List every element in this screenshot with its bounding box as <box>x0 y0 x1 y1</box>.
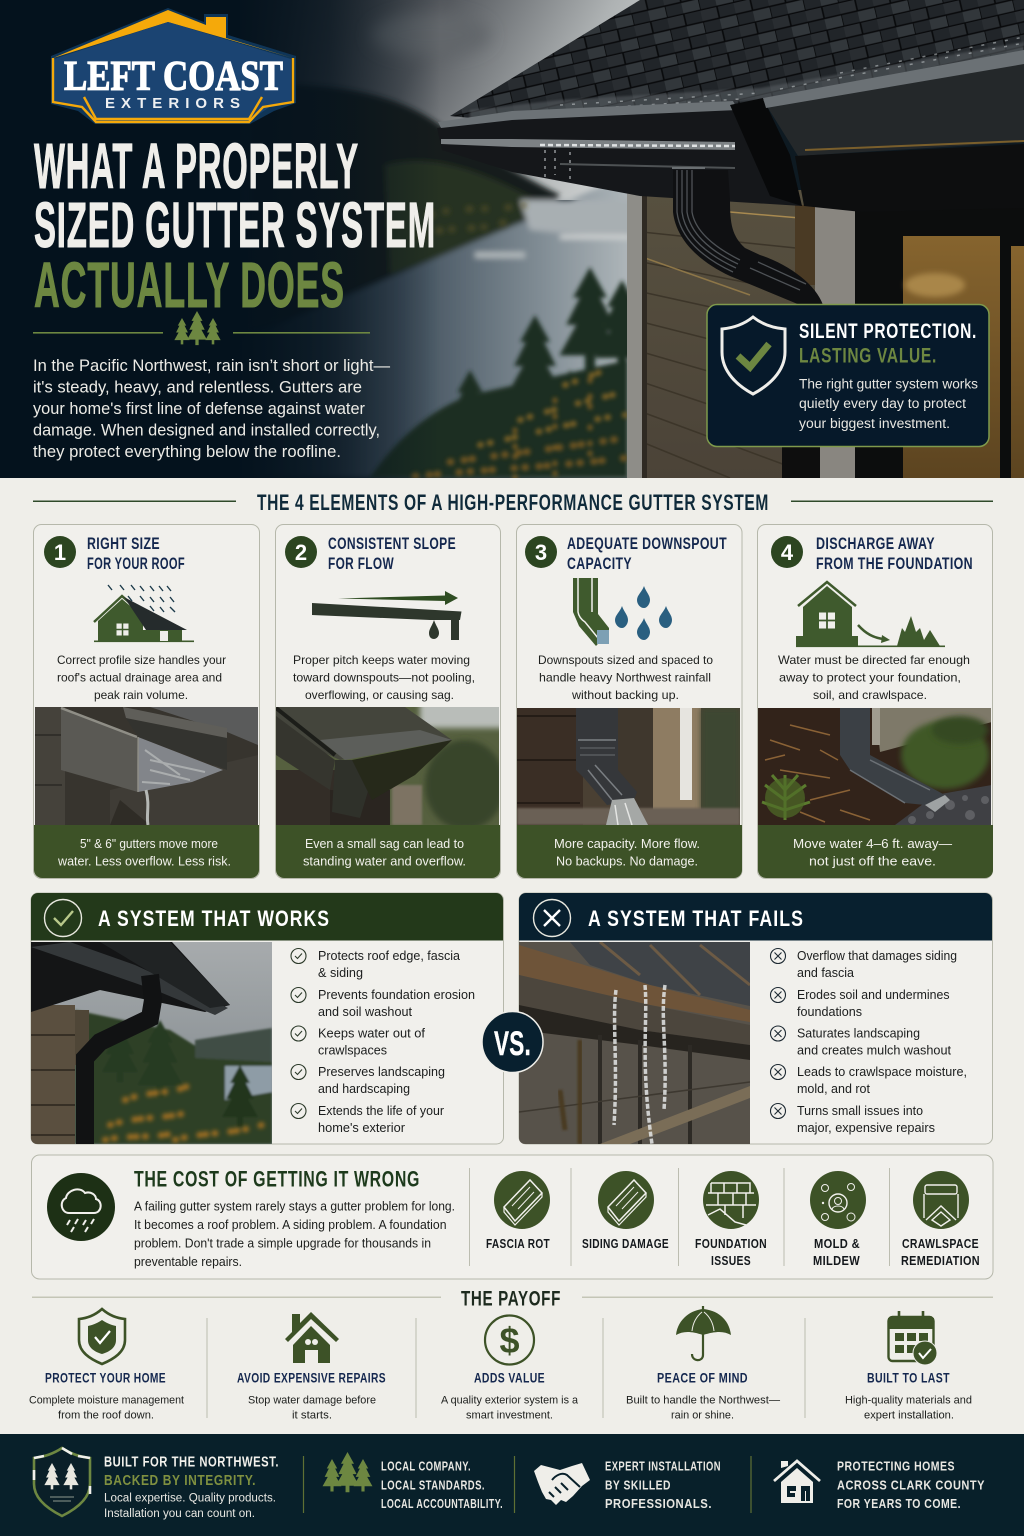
photo: downspout discharging water <box>517 708 740 825</box>
payoff: built to last: BUILT TO LAST <box>867 1371 950 1386</box>
icon: rain cloud <box>47 1173 115 1241</box>
payoff: peace of mind <box>626 1306 780 1422</box>
intro text: they protect everything below the roofline. <box>33 443 341 461</box>
text: protecting homes <box>837 1459 985 1511</box>
label: ISSUES <box>711 1254 751 1268</box>
payoff: peace of mind: PEACE OF MIND <box>657 1371 748 1386</box>
panel: the cost of getting it wrong: It becomes a roof problem. A siding problem. A foundation <box>134 1218 447 1232</box>
callout footer: Move water 4–6 ft. away— <box>793 837 953 851</box>
callout footer: No backups. No damage. <box>556 855 698 869</box>
list: benefits: & siding <box>318 966 363 980</box>
icon: x marks <box>770 948 786 1118</box>
payoff: avoid expensive repairs <box>237 1312 386 1422</box>
label <box>813 1237 860 1268</box>
icon: house in rain <box>94 585 194 642</box>
callout footer <box>758 825 993 878</box>
payoff: avoid expensive repairs: Stop water damage before <box>248 1394 376 1406</box>
payoff: protect your home: Complete moisture management <box>29 1394 184 1406</box>
list: failures <box>770 948 967 1135</box>
logo: Left Coast Exteriors: EXTERIORS <box>105 95 240 112</box>
callout: silent protection: The right gutter system works <box>799 376 978 391</box>
photo: overflowing failed gutter <box>519 942 750 1144</box>
icon: checks <box>291 948 306 1118</box>
header: a system that fails <box>519 893 992 940</box>
text: protecting homes: FOR YEARS TO COME. <box>837 1496 961 1511</box>
callout footer: 5" & 6" gutters move more <box>80 837 218 851</box>
panel: element 2 consistent slope: CONSISTENT SLOPE <box>328 535 456 553</box>
panel: element 3 adequate downspout <box>516 524 742 878</box>
panel: element 2 consistent slope: 2 <box>295 540 307 565</box>
panel: element 1 right size <box>34 524 260 878</box>
intro text: damage. When designed and installed correctly, <box>33 422 380 440</box>
intro text <box>33 357 390 461</box>
vs badge: VS. <box>494 1025 531 1063</box>
panel: a system that fails <box>519 893 992 1144</box>
panel: element 1 right size: Correct profile size handles your <box>57 653 226 667</box>
icon: downspout and water drops <box>573 578 672 646</box>
panel: element 2 consistent slope <box>276 524 510 878</box>
panel: the cost of getting it wrong <box>32 1155 993 1279</box>
text: local: LOCAL COMPANY. <box>381 1459 471 1474</box>
payoff: peace of mind: rain or shine. <box>671 1410 734 1422</box>
icon: shield with check <box>722 317 785 394</box>
callout footer: not just off the eave. <box>809 855 936 869</box>
heading: the payoff: THE PAYOFF <box>461 1288 561 1311</box>
panel: element 3 adequate downspout: Downspouts sized and spaced to <box>538 653 713 667</box>
payoff: protect your home: from the roof down. <box>58 1410 154 1422</box>
panel: element 4 discharge away: Water must be directed far enough <box>778 653 970 667</box>
payoff: built to last <box>845 1311 972 1422</box>
payoff: protect your home <box>29 1309 184 1422</box>
payoff: built to last: expert installation. <box>864 1410 954 1422</box>
icon: home <box>774 1461 820 1503</box>
text: expert installation: PROFESSIONALS. <box>605 1496 712 1511</box>
panel: a system that works <box>31 893 504 1144</box>
label: FOUNDATION <box>695 1237 767 1251</box>
list: failures: Saturates landscaping <box>797 1026 920 1040</box>
panel: the cost of getting it wrong: problem. Don't trade a simple upgrade for thousands in <box>134 1237 431 1251</box>
list: failures: and creates mulch washout <box>797 1044 952 1058</box>
photo: oversized gutter with water <box>35 707 258 825</box>
logo: Left Coast Exteriors <box>51 8 296 124</box>
heading: the 4 elements: THE 4 ELEMENTS OF A HIGH-PERFORMANCE GUTTER SYSTEM <box>257 490 769 515</box>
callout: silent protection: LASTING VALUE. <box>799 344 937 368</box>
text: expert installation <box>605 1459 721 1511</box>
intro text: it's steady, heavy, and relentless. Gutters are <box>33 378 362 396</box>
text: protecting homes: ACROSS CLARK COUNTY <box>837 1478 985 1492</box>
list: failures: Turns small issues into <box>797 1104 923 1118</box>
text: protecting homes: PROTECTING HOMES <box>837 1459 955 1474</box>
panel: element 3 adequate downspout: CAPACITY <box>567 555 632 573</box>
list: failures: Overflow that damages siding <box>797 949 957 963</box>
panel: element 1 right size: peak rain volume. <box>94 688 188 702</box>
label: FASCIA ROT <box>486 1237 550 1251</box>
panel: the cost of getting it wrong: THE COST OF GETTING IT WRONG <box>134 1167 420 1192</box>
list: benefits: and hardscaping <box>318 1082 410 1096</box>
panel: element 2 consistent slope: toward downspouts—not pooling, <box>293 671 475 685</box>
callout footer: Even a small sag can lead to <box>305 837 464 851</box>
panel: the cost of getting it wrong: A failing gutter system rarely stays a gutter problem for long. <box>134 1200 455 1214</box>
panel: element 1 right size: RIGHT SIZE <box>87 535 160 553</box>
payoff: avoid expensive repairs: it starts. <box>292 1410 332 1422</box>
list: failures: mold, and rot <box>797 1082 871 1096</box>
panel: element 4 discharge away: FROM THE FOUNDATION <box>816 555 973 573</box>
text: built for the northwest: Installation you can count on. <box>104 1508 255 1520</box>
payoff: adds value: ADDS VALUE <box>474 1371 545 1386</box>
payoff: adds value: A quality exterior system is a <box>441 1394 579 1406</box>
callout footer <box>517 825 742 878</box>
icon: house directing water to plants <box>796 582 945 647</box>
title: WHAT A PROPERLY <box>34 130 359 202</box>
panel: element 3 adequate downspout: without backing up. <box>571 688 679 702</box>
panel: payoff row <box>29 1306 972 1422</box>
panel: element 4 discharge away: soil, and crawlspace. <box>813 688 927 702</box>
logo: Left Coast Exteriors: LEFT COAST <box>64 54 283 100</box>
label <box>695 1237 767 1268</box>
icon: siding damage <box>598 1171 654 1229</box>
panel: element 1 right size: 1 <box>54 540 66 565</box>
panel: element 4 discharge away: DISCHARGE AWAY <box>816 535 935 553</box>
title: ACTUALLY DOES <box>34 249 345 321</box>
header: a system that works: A SYSTEM THAT WORKS <box>98 906 330 931</box>
callout footer <box>276 825 500 878</box>
text: expert installation: BY SKILLED <box>605 1478 671 1492</box>
panel: element 4 discharge away: 4 <box>781 540 794 565</box>
list: failures: foundations <box>797 1005 862 1019</box>
text: expert installation: EXPERT INSTALLATION <box>605 1459 721 1474</box>
text: built for the northwest <box>104 1455 279 1520</box>
icon: fascia rot <box>494 1171 550 1229</box>
list: failures: Leads to crawlspace moisture, <box>797 1065 967 1079</box>
label <box>901 1237 980 1268</box>
payoff: adds value <box>441 1316 579 1422</box>
callout: silent protection: your biggest investment. <box>799 416 950 431</box>
header: a system that works <box>31 893 503 940</box>
intro text: In the Pacific Northwest, rain isn’t short or light— <box>33 357 390 375</box>
list: benefits: Protects roof edge, fascia <box>318 949 460 963</box>
list: benefits: Extends the life of your <box>318 1104 444 1118</box>
tree divider <box>33 311 370 345</box>
label: MILDEW <box>813 1254 860 1268</box>
panel: element 4 discharge away: away to protect your foundation, <box>779 671 961 685</box>
vs badge <box>482 1012 543 1072</box>
photo: working gutter and lake view <box>31 942 272 1144</box>
panel: element 3 adequate downspout: ADEQUATE DOWNSPOUT <box>567 535 727 553</box>
payoff: peace of mind: Built to handle the Northwest— <box>626 1394 780 1406</box>
list: benefits: home's exterior <box>318 1121 405 1135</box>
list: failures: and fascia <box>797 966 854 980</box>
payoff: protect your home: PROTECT YOUR HOME <box>45 1371 166 1386</box>
text: local: LOCAL STANDARDS. <box>381 1478 485 1492</box>
panel: element 3 adequate downspout: 3 <box>535 540 547 565</box>
panel: element 1 right size: roof's actual drainage area and <box>57 671 222 685</box>
list: benefits: Keeps water out of <box>318 1026 426 1040</box>
header: a system that fails: A SYSTEM THAT FAILS <box>588 906 804 931</box>
panel: element 2 consistent slope: Proper pitch keeps water moving <box>293 653 470 667</box>
hero photo: rainy northwest roof and gutter <box>0 0 1024 480</box>
list: failures: Erodes soil and undermines <box>797 988 950 1002</box>
title <box>34 130 436 321</box>
footer band <box>0 1434 1024 1536</box>
text: built for the northwest: BACKED BY INTEGRITY. <box>104 1473 256 1489</box>
icon: handshake <box>534 1463 590 1505</box>
list: benefits: Preserves landscaping <box>318 1065 445 1079</box>
list: benefits <box>291 948 475 1135</box>
panel: the cost of getting it wrong: preventable repairs. <box>134 1255 242 1269</box>
photo: gutter with proper pitch <box>276 707 499 825</box>
callout footer: More capacity. More flow. <box>554 837 700 851</box>
callout footer <box>34 825 259 878</box>
list: benefits: crawlspaces <box>318 1044 387 1058</box>
panel: element 1 right size: FOR YOUR ROOF <box>87 555 185 573</box>
text: local <box>381 1459 503 1511</box>
label: REMEDIATION <box>901 1254 980 1268</box>
payoff: adds value: smart investment. <box>466 1410 553 1422</box>
panel: element 2 consistent slope: overflowing, or causing sag. <box>305 688 454 702</box>
title: SIZED GUTTER SYSTEM <box>34 189 436 261</box>
icon: mold and mildew <box>810 1171 866 1229</box>
list: benefits: Prevents foundation erosion <box>318 988 475 1002</box>
intro text: your home's first line of defense against water <box>33 400 366 418</box>
icon: sloped gutter with arrow <box>312 591 462 640</box>
icon: foundation bricks <box>703 1171 759 1229</box>
payoff: adds value: $ <box>499 1320 520 1361</box>
payoff: avoid expensive repairs: AVOID EXPENSIVE REPAIRS <box>237 1371 386 1386</box>
label: MOLD & <box>814 1237 860 1251</box>
panel: element 4 discharge away <box>758 524 993 878</box>
text: built for the northwest: Local expertise. Quality products. <box>104 1493 276 1505</box>
panel: element 2 consistent slope: FOR FLOW <box>328 555 394 573</box>
panel: element 3 adequate downspout: handle heavy Northwest rainfall <box>539 671 711 685</box>
icon: crawlspace <box>913 1171 969 1229</box>
icon: northwest shield <box>34 1448 90 1516</box>
label: SIDING DAMAGE <box>582 1237 669 1251</box>
callout: silent protection <box>707 304 989 446</box>
callout footer: water. Less overflow. Less risk. <box>57 855 231 869</box>
text: built for the northwest: BUILT FOR THE NORTHWEST. <box>104 1455 279 1471</box>
photo: downspout extension in garden <box>758 708 992 825</box>
text: local: LOCAL ACCOUNTABILITY. <box>381 1496 503 1511</box>
callout footer: standing water and overflow. <box>303 855 466 869</box>
list: failures: major, expensive repairs <box>797 1121 935 1135</box>
callout: silent protection: quietly every day to protect <box>799 396 966 411</box>
list: benefits: and soil washout <box>318 1005 413 1019</box>
icon: evergreen trees <box>323 1452 372 1492</box>
payoff: built to last: High-quality materials and <box>845 1394 972 1406</box>
label: CRAWLSPACE <box>902 1237 979 1251</box>
